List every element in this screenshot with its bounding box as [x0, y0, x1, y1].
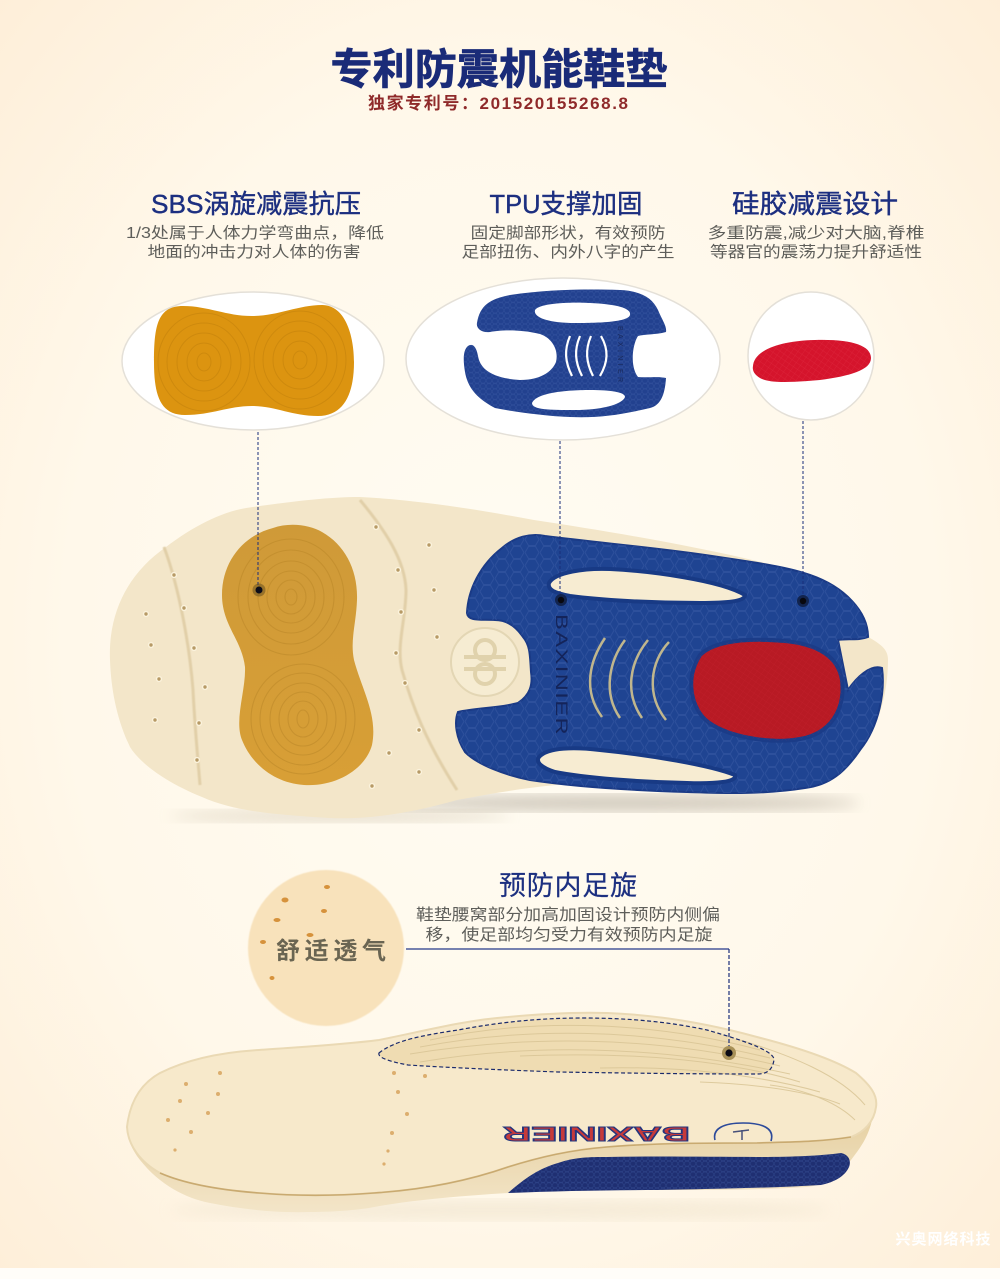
- insole body: [110, 497, 888, 818]
- callout: SBS gel piece: [122, 292, 384, 430]
- window rims: [538, 569, 745, 783]
- description: TPU: 足部扭伤、内外八字的产生: [462, 243, 674, 261]
- arch ridges: [410, 1025, 865, 1120]
- description: SBS: 地面的冲击力对人体的伤害: [148, 243, 360, 261]
- arch tinted zone: [379, 1018, 774, 1074]
- insole side wall: [127, 1100, 872, 1212]
- main insole, underside view: [110, 497, 888, 822]
- heading: SBS: SBS涡旋减震抗压: [151, 189, 361, 219]
- leader line: TPU: [555, 441, 567, 606]
- mirrored brand logo: BAXINIER: [502, 1122, 690, 1144]
- amber gel heel pad: [222, 525, 373, 785]
- perforation holes: [166, 1071, 427, 1166]
- column 2 text: TPU: [462, 189, 674, 261]
- leader line: silicone: [797, 421, 809, 607]
- description: pronation prevention: 鞋垫腰窝部分加高加固设计预防内侧偏: [416, 906, 720, 924]
- callout: breathable foam circle: [248, 870, 404, 1026]
- lower insole, top view: [127, 1013, 876, 1220]
- heading: TPU: TPU支撑加固: [490, 189, 642, 219]
- patent number subtitle: 独家专利号：201520155268.8: [368, 93, 628, 113]
- round logo emboss: [451, 628, 519, 696]
- blue TPU side edge: [508, 1153, 850, 1193]
- leader line: SBS: [252, 432, 266, 596]
- brand text on frame: BAXINIER: [552, 614, 571, 736]
- description: SBS: 1/3处属于人体力学弯曲点，降低: [126, 224, 384, 242]
- description: silicone: 多重防震,减少对大脑,脊椎: [708, 224, 924, 242]
- label: comfortable breathable: 舒适透气: [276, 938, 386, 965]
- insole top surface: [127, 1013, 876, 1195]
- red silicone forefoot pad: [691, 640, 843, 741]
- heading: silicone: 硅胶减震设计: [732, 189, 898, 219]
- insole rim line: [160, 1137, 851, 1195]
- callout: TPU support piece: BAXINIER: [616, 326, 623, 382]
- column 3 text: silicone: [708, 189, 924, 261]
- insole shadow: [380, 795, 860, 811]
- callout: silicone piece: [748, 292, 874, 420]
- insole shadow: [170, 1200, 830, 1220]
- description: pronation prevention: 移，使足部均匀受力有效预防内足旋: [426, 926, 712, 944]
- size badge: [715, 1123, 772, 1141]
- leader line: pronation: [406, 949, 736, 1060]
- callout: TPU support piece: [406, 278, 720, 440]
- blue TPU support frame: [456, 535, 883, 793]
- description: SBS: [126, 224, 384, 261]
- description: TPU: 固定脚部形状，有效预防: [470, 224, 666, 242]
- flex slits: [590, 638, 669, 720]
- watermark: 兴奥网络科技: [896, 1230, 990, 1248]
- heading: pronation prevention: 预防内足旋: [499, 871, 637, 901]
- title: 专利防震机能鞋垫: [330, 46, 668, 93]
- description: pronation prevention: [416, 906, 720, 944]
- column 1 text: SBS: [126, 189, 384, 261]
- description: silicone: 等器官的震荡力提升舒适性: [710, 243, 922, 261]
- groove lines: [164, 500, 457, 790]
- description: TPU: [462, 224, 674, 261]
- description: silicone: [708, 224, 924, 261]
- perforation holes: [144, 525, 439, 788]
- arch dashed outline: [379, 1018, 774, 1074]
